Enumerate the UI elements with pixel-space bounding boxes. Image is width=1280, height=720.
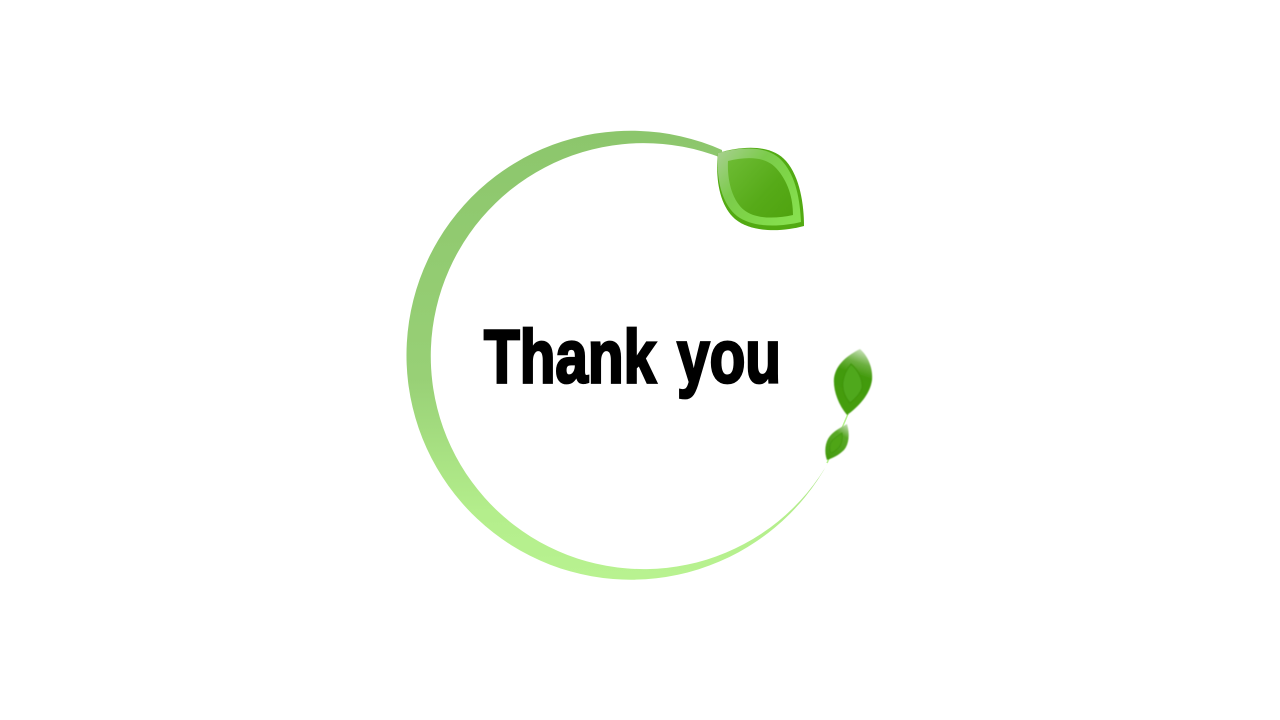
icon: medium leaf <box>834 349 872 415</box>
circular vine ring <box>406 131 830 580</box>
icon: large leaf <box>717 148 804 230</box>
stem between small leaves <box>827 414 848 463</box>
title: Thank you <box>484 314 781 398</box>
icon: small leaf <box>825 424 849 460</box>
